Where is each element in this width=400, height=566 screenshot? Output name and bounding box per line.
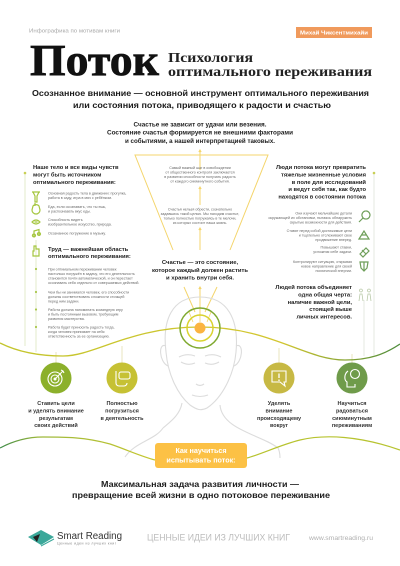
subtitle: оптимального переживания (168, 65, 372, 80)
closing statement: превращение всей жизни в одно потоковое переживание (72, 491, 331, 500)
left panel dot (24, 172, 26, 174)
icon: work (33, 246, 39, 256)
logo (28, 530, 122, 546)
focus rays (189, 312, 211, 322)
right text 2 (287, 229, 352, 242)
work heading: оптимального переживания: (48, 254, 131, 260)
right text 4 (293, 260, 352, 273)
subtitle (168, 51, 372, 80)
right text 3: усложняя себе задачи. (313, 250, 352, 254)
icon: food (32, 203, 40, 214)
right common statement (275, 284, 353, 320)
left text: vision: изобразительное искусство, природа. (48, 222, 112, 226)
work text 3: развития мастерства. (48, 317, 85, 321)
right text 4: психической энергии. (316, 269, 352, 273)
left text: vision (48, 218, 112, 226)
happiness statement: и событиями, а нашей интерпретацией таковых. (125, 137, 275, 145)
title: Поток (30, 36, 160, 85)
lower wave left (0, 437, 155, 460)
funnel text bottom: только полностью погружаясь в те мелочи, (164, 216, 236, 220)
icon: control (360, 262, 368, 271)
left text: vision: Способность видеть (48, 218, 83, 222)
right common statement: личных интересов. (296, 314, 352, 320)
step 2: immerse: Полностью (106, 401, 138, 407)
center statement: которое каждый должен растить (152, 267, 248, 274)
right text 4: Контролируют ситуацию, открывая (293, 260, 352, 264)
decorative lines (25, 172, 374, 364)
step 1: set goals: своих действий (34, 422, 78, 429)
step 1: set goals: Ставить цели (37, 401, 75, 407)
work text 4: когда человек принимает на себя (48, 330, 105, 334)
right text 2: и тщательно отслеживают свое (299, 234, 352, 238)
right text 4: новое направление для своей (301, 264, 352, 268)
work text 3: и быть постоянным вызовом, требующим (48, 312, 119, 316)
author badge (296, 27, 372, 38)
icon: eye (32, 220, 40, 224)
main statement (32, 88, 369, 110)
right text 1: скрытые возможности для действия. (290, 220, 352, 224)
left panel heading (33, 165, 119, 186)
right text 1: Они изучают мельчайшие детали (295, 212, 352, 216)
main statement: Осознанное внимание — основной инструмент оптимального переживания (32, 88, 369, 98)
step 3: attention: внимание (266, 408, 292, 414)
center statement: и хранить внутри себя. (166, 274, 234, 282)
funnel text top (164, 166, 236, 184)
work text 2: перед ним задачи. (48, 300, 79, 304)
right text 3 (313, 246, 352, 254)
work text 4: ответственность за ее организацию. (48, 334, 110, 338)
closing statement (72, 480, 331, 500)
closing statement: Максимальная задача развития личности — (101, 480, 299, 489)
right panel heading: находятся в состоянии потока (278, 194, 367, 200)
funnel text top: Самый важный шаг в освобождении (169, 166, 231, 170)
right panel dot (373, 172, 375, 174)
left text: food (48, 205, 106, 214)
step 4: rejoice: радоваться (336, 408, 368, 414)
funnel text bottom: задавшись такой целью. Мы находим счастье, (161, 212, 239, 216)
step 2: immerse: погрузиться (105, 408, 139, 414)
step 4: rejoice: Научиться (337, 401, 367, 407)
main statement: или состояния потока, приводящего к радости и счастью (73, 100, 331, 110)
tagline: ЦЕННЫЕ ИДЕИ ИЗ ЛУЧШИХ КНИГ (147, 532, 290, 542)
logo: Ценные идеи из лучших книг (57, 542, 117, 546)
right panel heading: и ведут себя так, как будто (288, 186, 366, 193)
icon: mountain (359, 231, 369, 239)
step 4: rejoice (332, 362, 372, 429)
left panel heading: могут быть источником (33, 172, 101, 178)
funnel text bottom: Счастья нельзя обрести, сознательно (168, 208, 232, 212)
work heading (48, 246, 131, 260)
step 1: set goals: результатам (39, 416, 73, 422)
lower wave right (247, 437, 400, 458)
work text 2: Чем бы ни занимался человек, его способности (48, 290, 129, 294)
subtitle: Психология (168, 51, 253, 66)
work text 1: настолько погружён в задачу, что его деятельность (48, 272, 135, 276)
funnel text top: в развитии способности получать радость (164, 175, 236, 179)
author badge: Михай Чиксентмихайи (300, 30, 368, 36)
icon: stakes (360, 248, 369, 257)
logo: Smart Reading (57, 531, 122, 542)
right panel heading (276, 165, 367, 200)
center statement (152, 260, 248, 282)
happiness statement: Счастье не зависит от удачи или везения. (134, 122, 267, 128)
right text 1 (268, 212, 352, 224)
call to action box: испытывать поток: (166, 456, 236, 464)
work text 3 (48, 308, 123, 321)
work text 4: Работа будет приносить радость тогда, (48, 326, 115, 330)
right common statement: наличие важной цели, (288, 299, 352, 306)
right panel heading: Люди потока могут превратить (276, 165, 366, 171)
call to action box: Как научиться (175, 446, 227, 455)
right text 1: окружающей их обстановки, пытаясь обнаружить (268, 216, 352, 220)
website: www.smartreading.ru (308, 535, 373, 542)
left text: food: Еда, если осознавать, что ты ешь, (48, 205, 106, 209)
left panel heading: оптимального переживания: (33, 180, 116, 186)
work text 2: должны соответствовать сложности стоящей (48, 295, 124, 299)
step 2: immerse: в деятельность (100, 416, 144, 422)
funnel text bottom: из которых состоит наша жизнь. (173, 221, 227, 225)
right text 2: Ставят перед собой достижимые цели (287, 229, 352, 233)
work text 1: становится почти автоматической, и он перестает (48, 276, 133, 280)
funnel triangle (135, 150, 268, 316)
center statement: Счастье — это состояние, (162, 260, 238, 266)
icon: magnifier (359, 211, 370, 222)
wave top (0, 327, 400, 360)
right text 3: Повышают ставки, (320, 246, 352, 250)
right common statement: одна общая черта: (298, 292, 352, 298)
left text: body (48, 192, 126, 200)
icon: music (32, 230, 40, 237)
funnel text top: от общественного контроля заключается (165, 170, 235, 174)
step 3: attention: вокруг (270, 423, 289, 429)
left text: body: работа в саду, игра в мяч с ребёнком. (48, 196, 112, 200)
step 2: immerse (100, 362, 144, 422)
work text 3: Работа должна напоминать командную игру (48, 308, 123, 312)
left text: body: Основная радость тела в движении: прогулка, (48, 192, 126, 196)
work text 1: осознавать себя отдельно от совершаемых действий. (48, 281, 139, 285)
work text 4 (48, 326, 115, 338)
work bullet dots (35, 268, 37, 328)
funnel text top: от каждого сиюминутного события. (170, 180, 230, 184)
step 3: attention: происходящему (257, 416, 302, 422)
work text 1 (48, 268, 139, 285)
left panel heading: Наше тело и все виды чувств (33, 165, 119, 171)
step 1: set goals: и уделять внимание (28, 408, 84, 414)
head outline (125, 297, 280, 458)
happiness statement: Состояние счастья формируется не внешними факторами (107, 130, 293, 136)
right text 2: продвижение вперед. (315, 238, 352, 242)
left text: music: Осознанное погружение в музыку. (48, 232, 106, 236)
right common statement: стоящей выше (309, 306, 353, 313)
right panel heading: в поле для исследований (292, 179, 366, 186)
funnel text bottom (161, 208, 239, 225)
right panel heading: тяжелые жизненные условия (281, 172, 366, 178)
happiness statement (107, 122, 293, 145)
step 3: attention: Уделять (268, 401, 291, 407)
focus circles (180, 308, 220, 348)
work text 1: При оптимальном переживании человек (48, 268, 117, 272)
right common statement: Людей потока объединяет (275, 284, 352, 291)
left text: food: и распознавать вкус еды. (48, 210, 91, 214)
work text 2 (48, 290, 129, 304)
call to action box (155, 443, 247, 468)
work heading: Труд — важнейшая область (48, 246, 129, 253)
icon: body (32, 192, 40, 202)
step 4: rejoice: сиюминутным (332, 416, 372, 422)
step 3: attention (257, 362, 302, 429)
step 1: set goals (28, 362, 84, 429)
step 4: rejoice: переживаниям (332, 423, 372, 429)
header label: Инфографика по мотивам книги (29, 28, 120, 34)
icon: people (359, 289, 371, 301)
